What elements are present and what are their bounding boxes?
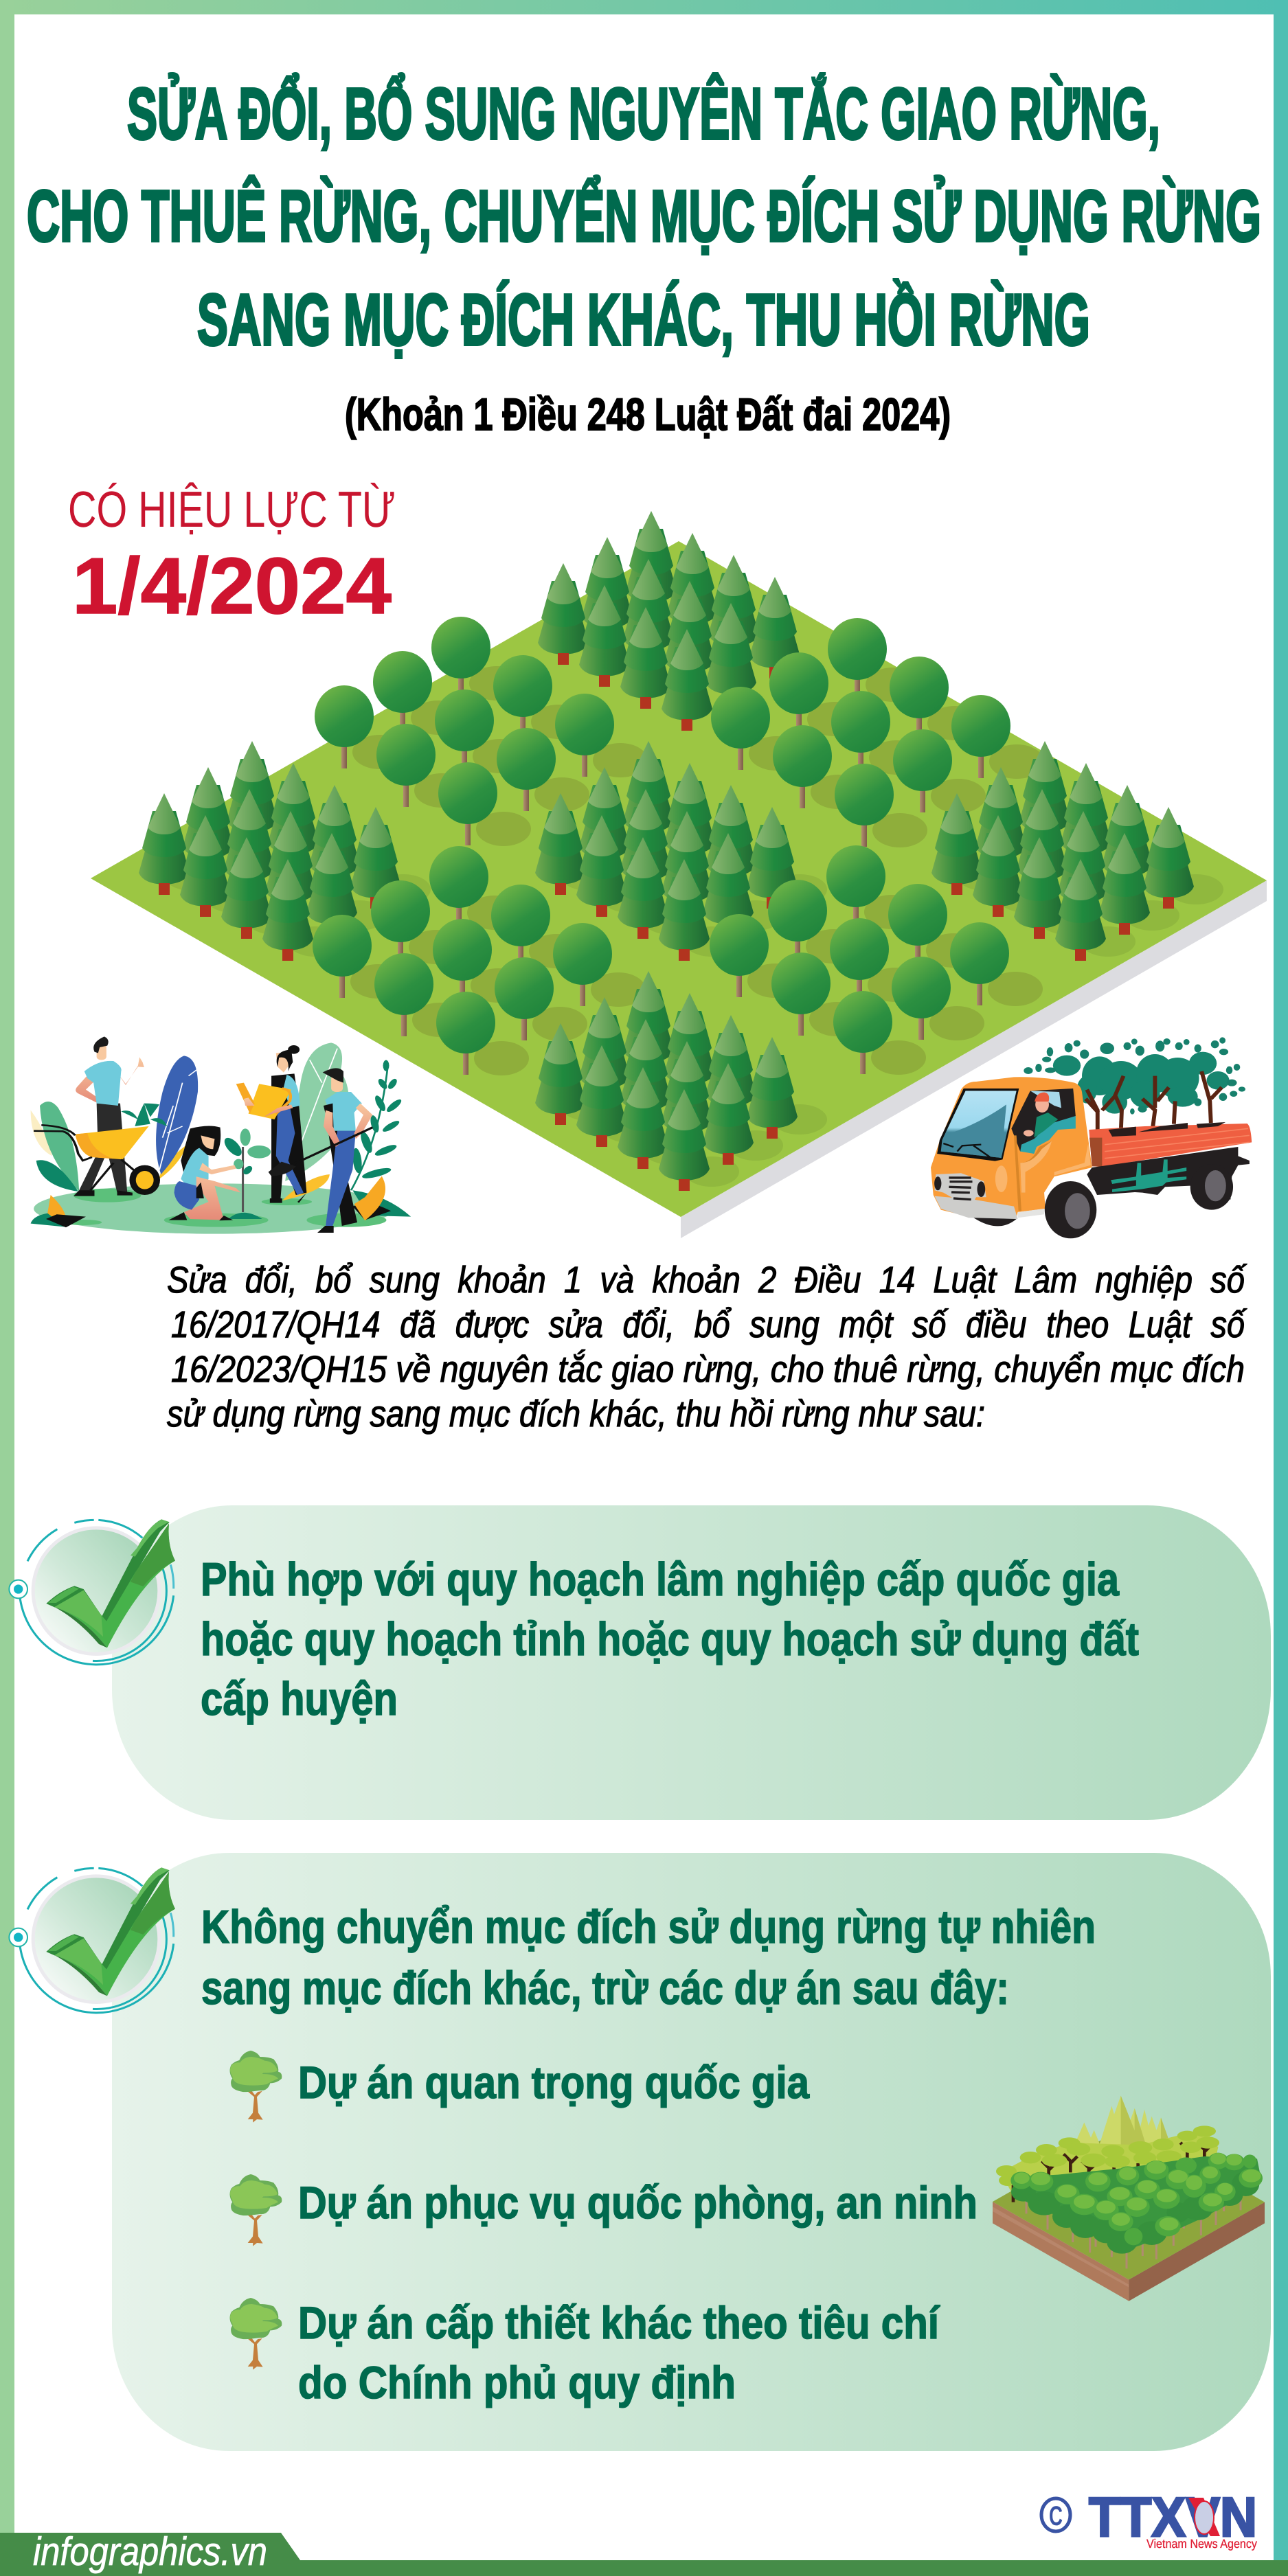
list item 2: Dự án phục vụ quốc phòng, an ninh [298,2177,978,2228]
website: infographics.vn [33,2529,267,2574]
pine cluster: left [139,741,401,961]
card heading text [201,1901,1096,2014]
effective date label: CÓ HIỆU LỰC TỪ [68,481,396,538]
ground [91,541,1267,1217]
man with wheelbarrow [74,1036,144,1196]
intro paragraph: sử dụng rừng sang mục đích khác, thu hồi rừng như sau: [167,1393,985,1435]
illustration: truck carrying trees [931,1037,1252,1238]
foliage [1024,1037,1245,1115]
list item 3: Dự án cấp thiết khác theo tiêu chí [298,2297,940,2348]
icon: check mark [9,1867,175,2013]
standing woman with watering can [236,1045,306,1203]
card text [201,1553,1139,1725]
card heading text: sang mục đích khác, trừ các dự án sau đây: [201,1962,1009,2014]
globe [1195,2501,1214,2534]
wheelbarrow [34,1125,160,1195]
card text: hoặc quy hoạch tỉnh hoặc quy hoạch sử dụng đất [201,1613,1139,1665]
forest illustration [91,511,1267,1238]
icon: tree bullet 1 [230,2051,282,2123]
red V accent [1188,2498,1220,2536]
list item 3 [298,2297,940,2408]
round trees: lower left [313,846,612,1075]
agency name: Vietnam News Agency [1146,2537,1257,2551]
panel: second principle [9,1853,1271,2451]
pine cluster: top [538,511,800,731]
rear wheel [1190,1164,1233,1210]
agency letters: TTXVN [1089,2487,1257,2549]
card heading text: Không chuyển mục đích sử dụng rừng tự nhiên [201,1901,1096,1953]
chassis [1087,1147,1250,1200]
list item 1: Dự án quan trọng quốc gia [298,2057,810,2108]
copyright mark [1041,2498,1070,2531]
copyright mark: C [1049,2501,1063,2531]
panel: first principle [9,1505,1271,1820]
list item 3: do Chính phủ quy định [298,2357,736,2408]
man with shovel [269,1068,372,1233]
logo: TTXVN [1041,2487,1257,2551]
card text: Phù hợp với quy hoạch lâm nghiệp cấp quốc gia [201,1553,1120,1606]
pine cluster: right [931,741,1194,961]
illustration: forest block [993,2096,1265,2301]
crouching woman [169,1126,240,1220]
footer bar [0,2529,1288,2576]
round trees: upper left [315,617,614,845]
card text: cấp huyện [201,1673,398,1725]
icon: check mark [9,1519,175,1665]
round trees: upper right [711,618,1010,847]
card background [112,1505,1271,1820]
ground side strip [681,880,1267,1238]
title [27,73,1261,361]
icon: tree bullet 3 [230,2298,282,2370]
shadows [164,666,1223,1187]
cab [931,1077,1092,1218]
icon: tree bullet 2 [230,2174,282,2246]
grille and bumper [935,1196,1018,1219]
intro paragraph [167,1259,1247,1435]
sapling [221,1128,271,1219]
footer tag [0,2533,300,2576]
pine cluster: middle [535,741,798,961]
illustration: people planting trees [31,1036,411,1234]
truck bed [1089,1124,1252,1167]
tree trunks [1086,1071,1222,1138]
pine cluster: bottom [535,971,798,1191]
front wheel [1045,1181,1096,1238]
card background [112,1853,1271,2451]
effective date: 1/4/2024 [72,541,392,630]
subtitle: (Khoản 1 Điều 248 Luật Đất đai 2024) [345,389,951,440]
round trees: lower right [710,845,1009,1074]
